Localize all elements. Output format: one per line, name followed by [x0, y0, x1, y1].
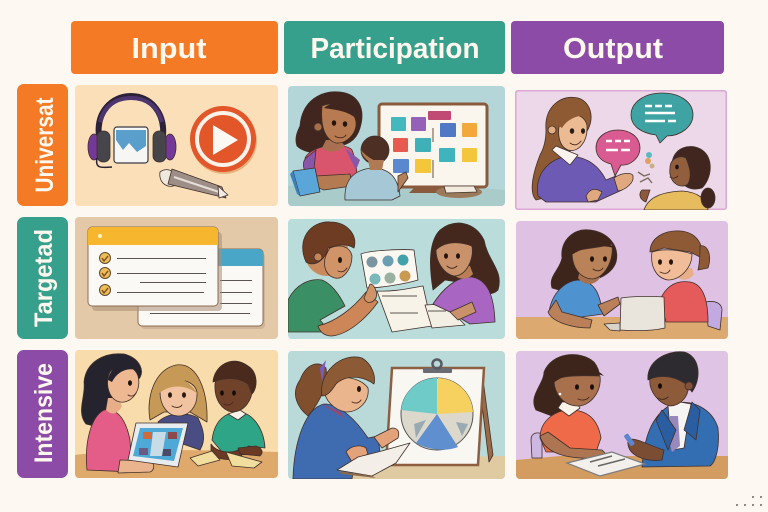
girl in orange [534, 355, 612, 460]
wooden table [75, 450, 278, 478]
easel with pie chart [386, 360, 493, 465]
sparkling idea icons [638, 152, 654, 183]
chair [531, 433, 542, 458]
column header: Output: Output [563, 33, 663, 65]
panel: universal participation, teacher and boy at sticky note board [288, 86, 505, 206]
row label: Universal [17, 84, 68, 206]
row label: Universal: Universat [31, 97, 59, 192]
row label: Targeted: Targetad [30, 229, 58, 327]
sheet of paper [337, 443, 410, 478]
blonde girl [149, 365, 207, 450]
teacher [296, 92, 362, 190]
wooden table [516, 456, 728, 479]
icon: headphones with picture card [88, 96, 176, 167]
panel: intensive input, teacher and two students with tablet [75, 350, 278, 478]
panel: intensive participation, girl with pie chart on easel [288, 351, 505, 479]
teal speech bubble [631, 93, 693, 143]
row label: Intensive [17, 350, 68, 478]
row label: Targeted [17, 217, 68, 339]
panel: targeted participation, boy and girl with picture cards [288, 219, 505, 339]
tablet [128, 423, 188, 467]
girl in yellow [640, 146, 715, 210]
corner sparkle mark [736, 496, 762, 506]
boy in green [211, 361, 265, 459]
front checklist window [88, 227, 222, 311]
boy in blue suit [624, 352, 719, 467]
column header: Participation: Participation [310, 33, 480, 65]
row label: Intensive: Intensive [30, 363, 58, 463]
boy from behind [345, 136, 408, 200]
girl in red [650, 231, 710, 322]
girl with ponytail in blue [293, 357, 399, 479]
panel: intensive output, girl and boy with open book [516, 351, 728, 479]
girl in purple [430, 223, 499, 324]
stack of papers [436, 186, 482, 198]
boy in green [288, 222, 378, 336]
column header: Participation [284, 21, 505, 74]
back window [138, 249, 265, 329]
icon: pen [160, 169, 228, 198]
girl in blue [548, 230, 620, 328]
desk [352, 456, 505, 479]
column header: Input [71, 21, 278, 74]
wooden table [516, 317, 728, 339]
pink speech bubble [596, 130, 640, 176]
column header: Input: Input [132, 33, 207, 65]
teacher with black hair [81, 354, 154, 473]
blue book [290, 168, 320, 196]
panel: universal output, woman and girl with speech bubbles [515, 90, 727, 210]
chair [706, 301, 722, 330]
woman with brown ponytail [532, 97, 633, 202]
laptop [604, 296, 665, 331]
panel: targeted output, two girls at a laptop [516, 221, 728, 339]
open booklet [364, 284, 465, 332]
picture card [361, 250, 418, 288]
open book [567, 452, 645, 476]
worksheets on table [190, 451, 262, 468]
panel: universal input, headphones, play button and pen [75, 85, 278, 206]
sticky note board [379, 104, 487, 193]
panel: targeted input, checklist windows [75, 217, 278, 339]
icon: play button [190, 106, 257, 174]
column header: Output [511, 21, 724, 74]
